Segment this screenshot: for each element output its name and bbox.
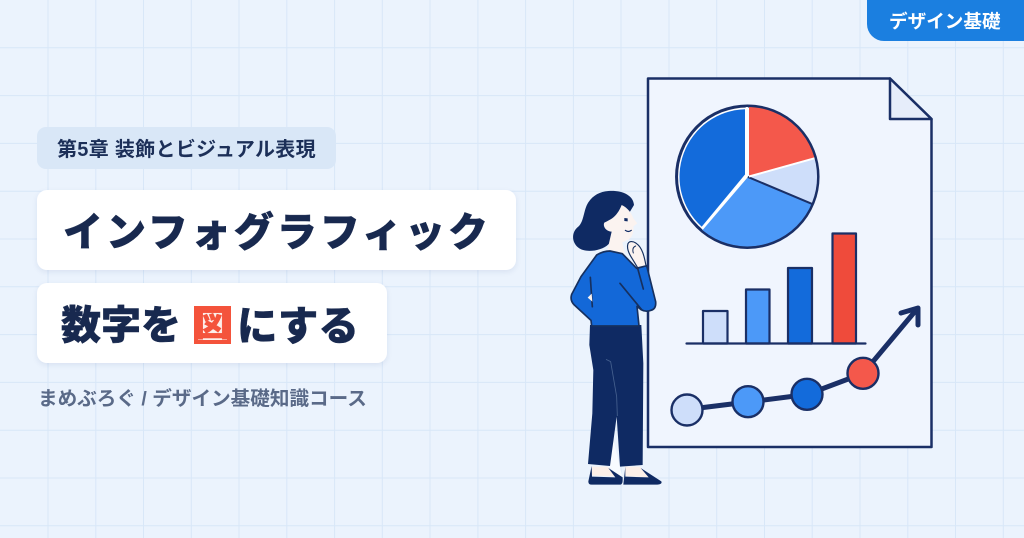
document sheet (648, 78, 932, 447)
head and hair (573, 191, 637, 255)
title card: turn numbers into figures (37, 283, 387, 363)
chapter label (37, 127, 336, 169)
bar chart (686, 234, 866, 344)
title card: infographic: インフォグラフィック (63, 211, 491, 255)
person (571, 191, 662, 485)
pie chart (676, 106, 818, 248)
title card: infographic (37, 190, 516, 270)
trousers (588, 325, 643, 467)
subtitle: まめぶろぐ / デザイン基礎知識コース (38, 388, 367, 410)
chapter label: 第5章 装飾とビジュアル表現 (57, 139, 316, 161)
title card: turn numbers into figures: 数字を (61, 304, 181, 348)
sweater and hand (571, 242, 656, 326)
tag: design basics (867, 0, 1024, 41)
line chart with arrow (672, 308, 918, 426)
shoes (588, 440, 662, 485)
title card: turn numbers into figures: にする (237, 303, 359, 349)
highlighted character: 図 (196, 306, 230, 344)
tag: design basics: デザイン基礎 (889, 11, 1001, 32)
